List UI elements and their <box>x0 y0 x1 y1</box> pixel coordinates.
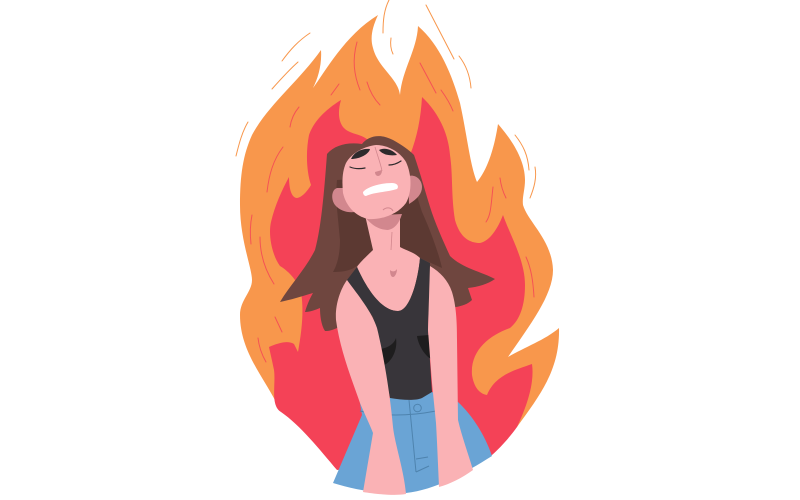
face <box>342 145 410 219</box>
tank shadow right <box>417 335 431 359</box>
neck line and necklace <box>390 232 397 277</box>
tank top <box>347 258 432 400</box>
chin crease <box>383 208 393 211</box>
outer orange flame <box>240 15 559 470</box>
eyebrow right <box>379 149 397 155</box>
left ear <box>332 188 355 212</box>
hair shadow <box>333 175 442 272</box>
nose <box>375 147 382 176</box>
closed eyes <box>350 161 401 169</box>
eyebrow left <box>351 149 370 159</box>
mouth <box>363 183 398 196</box>
right ear <box>408 176 422 204</box>
neck and chest <box>357 215 420 311</box>
inner red flame <box>269 97 533 470</box>
left arm <box>336 280 406 495</box>
motion lines around flame <box>236 0 536 198</box>
neck shadow <box>364 214 402 230</box>
skirt seams <box>360 400 436 472</box>
tank shadow left <box>380 338 396 365</box>
skirt <box>333 392 492 493</box>
flame accent strokes <box>250 42 534 362</box>
hair back <box>280 136 495 331</box>
right arm <box>428 266 473 487</box>
